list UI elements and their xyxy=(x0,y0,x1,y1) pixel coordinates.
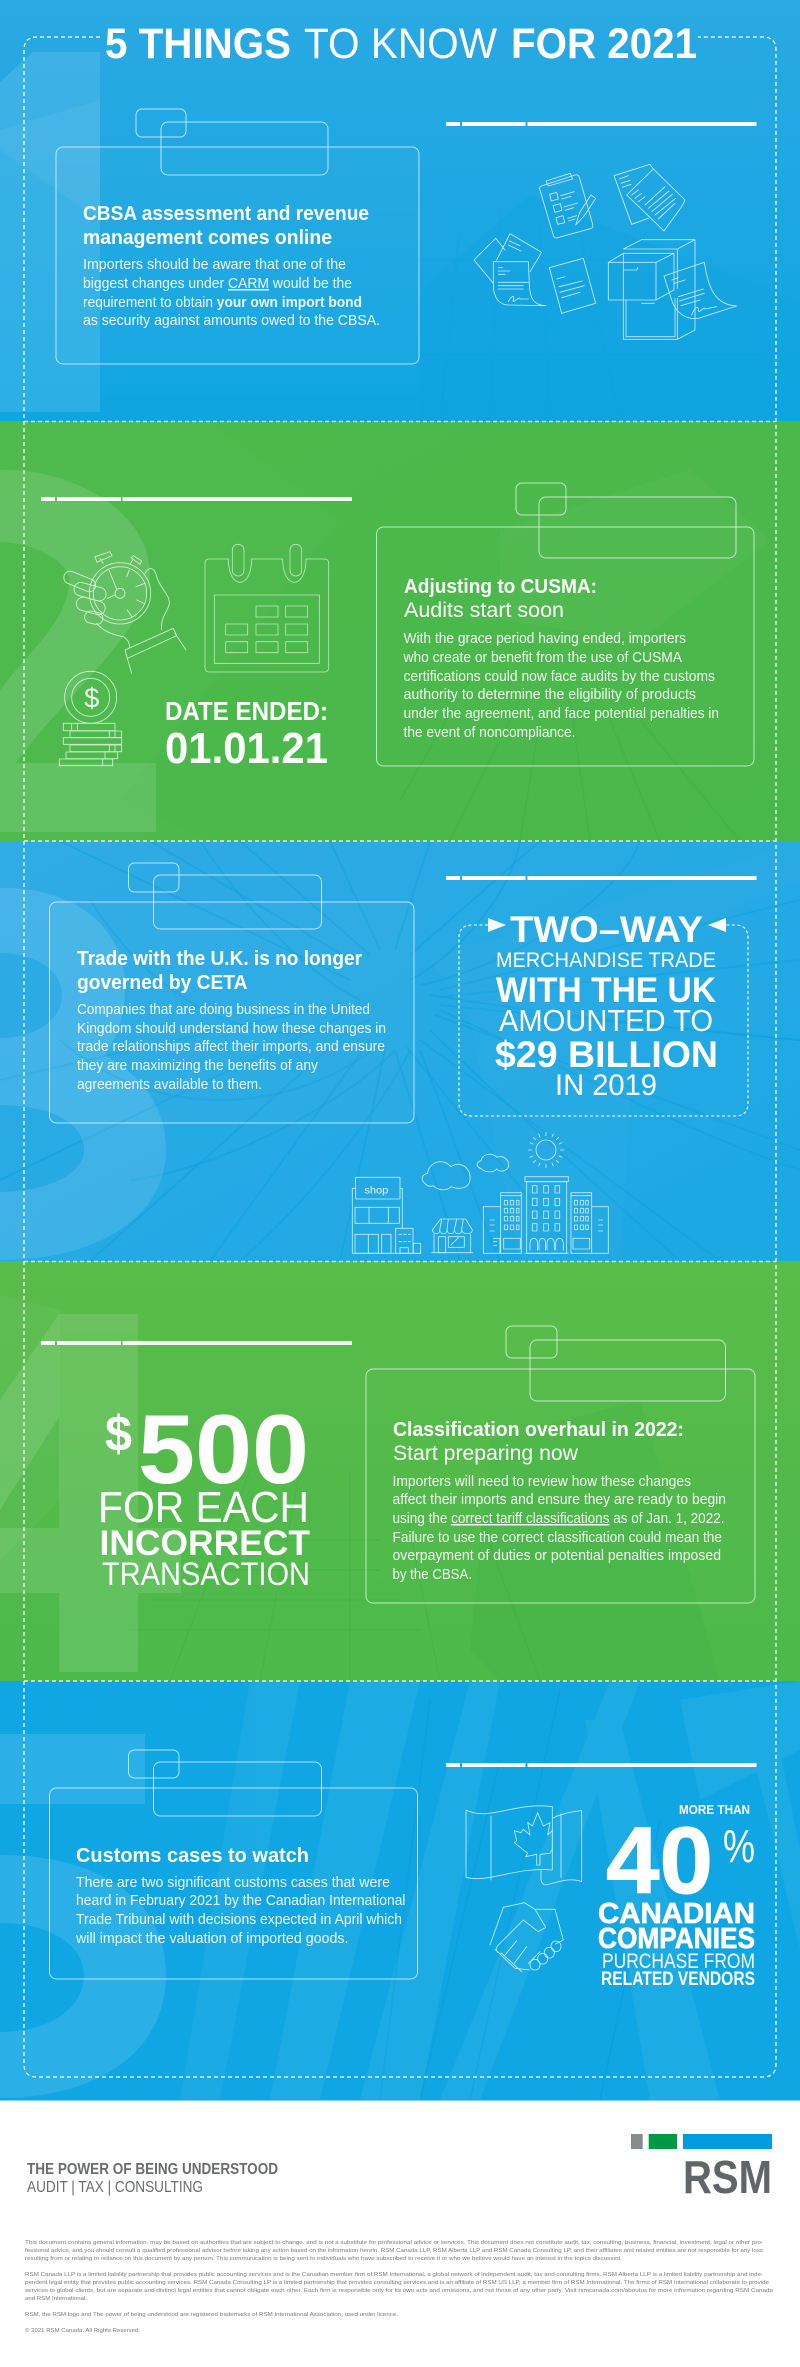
callout: 40% of Canadian companies xyxy=(598,1802,755,1990)
panel: customs cases card xyxy=(50,1750,418,1979)
icon: city with shops, clouds and sun xyxy=(352,1132,608,1253)
legal disclaimer: fessional advice, and you should consult a qualified professional advisor before taking any action based on the information herein. RSM Canada LLP, RSM Alberta LLP and RSM Canada Consulting LP, and their affiliates and related entities are not responsible for any loss xyxy=(25,2248,763,2254)
body text: certifications could now face audits by the customs xyxy=(404,668,715,685)
card frames xyxy=(366,1326,755,1603)
body text: Trade Tribunal with decisions expected in April which xyxy=(76,1911,402,1928)
callout: $500 penalty: TRANSACTION xyxy=(102,1556,310,1592)
body text: the event of noncompliance. xyxy=(404,724,576,741)
background numeral 5 xyxy=(0,1734,166,2098)
body text: Companies that are doing business in the United xyxy=(77,1001,370,1018)
panel: classification card xyxy=(366,1326,755,1603)
title: FOR 2021 xyxy=(511,20,697,68)
callout: date ended xyxy=(165,696,328,773)
background numeral 3 xyxy=(0,888,166,1260)
callout: $500 penalty: 500 xyxy=(138,1394,309,1504)
body text: under the agreement, and face potential penalties in xyxy=(404,705,719,722)
footer tagline: THE POWER OF BEING UNDERSTOOD xyxy=(27,2161,278,2178)
body text xyxy=(77,1001,386,1093)
callout: 40% of Canadian companies: 40 xyxy=(606,1808,713,1914)
callout text: AMOUNTED TO xyxy=(499,1003,713,1038)
callout: 40% of Canadian companies: CANADIAN xyxy=(598,1898,755,1930)
accent bar xyxy=(446,1763,756,1767)
accent bar xyxy=(446,876,756,880)
body text xyxy=(403,630,719,741)
heading: Customs cases to watch xyxy=(76,1844,309,1867)
title: 5 THINGS xyxy=(105,20,291,68)
callout text: $29 BILLION xyxy=(495,1034,718,1075)
dashed callout frame xyxy=(459,925,748,1116)
icon: handshake xyxy=(490,1903,563,1972)
callout: 40% of Canadian companies: % xyxy=(723,1820,755,1872)
footer tagline xyxy=(27,2161,278,2196)
heading: Start preparing now xyxy=(393,1442,579,1465)
body text: Importers will need to review how these changes xyxy=(392,1473,691,1490)
icon: calendar xyxy=(205,544,329,672)
callout: 40% of Canadian companies: MORE THAN xyxy=(679,1802,750,1817)
body text xyxy=(83,256,380,329)
heading: Classification overhaul in 2022: xyxy=(393,1418,684,1441)
body text: Failure to use the correct classification could mean the xyxy=(392,1529,722,1546)
icon: documents and filing cabinet xyxy=(474,164,737,339)
body text: With the grace period having ended, importers xyxy=(404,630,686,647)
callout: two-way trade xyxy=(459,909,748,1116)
callout: date ended: DATE ENDED: xyxy=(165,696,328,726)
legal disclaimer xyxy=(25,2240,774,2334)
body text: overpayment of duties or potential penalties imposed xyxy=(392,1547,721,1564)
title xyxy=(105,20,697,68)
callout text: MERCHANDISE TRADE xyxy=(496,949,716,972)
body text: who create or benefit from the use of CUSMA xyxy=(403,649,682,666)
body text: trade relationships affect their imports, and ensure xyxy=(77,1038,385,1055)
accent bar xyxy=(41,497,352,501)
icon: Canadian flag xyxy=(466,1806,582,1885)
legal disclaimer: services to global clients, but are separate and distinct legal entities that cannot obligate each other. Each firm is responsible only for its own acts and omissions, and not those of any other party. Visit rsmcanada.com/aboutus for more information regarding RSM Canada xyxy=(25,2288,774,2294)
callout: 40% of Canadian companies: PURCHASE FROM xyxy=(602,1950,755,1973)
heading xyxy=(77,947,362,994)
panel: section 4 background xyxy=(0,1261,800,1681)
heading: Audits start soon xyxy=(404,599,564,622)
heading xyxy=(83,202,369,249)
body text: requirement to obtain your own import bond xyxy=(83,294,362,311)
callout: $500 penalty: FOR EACH xyxy=(98,1483,309,1532)
body text: heard in February 2021 by the Canadian International xyxy=(76,1892,406,1909)
heading: governed by CETA xyxy=(77,971,248,994)
arrows xyxy=(488,918,726,932)
legal disclaimer: © 2021 RSM Canada. All Rights Reserved. xyxy=(25,2327,140,2334)
card frames xyxy=(50,863,414,1123)
panel: CUSMA card xyxy=(376,483,754,766)
body text: affect their imports and ensure they are ready to begin xyxy=(392,1491,726,1508)
legal disclaimer: RSM, the RSM logo and The power of being understood are registered trademarks of RSM International Association, used under licence. xyxy=(25,2312,398,2318)
callout text: WITH THE UK xyxy=(496,971,716,1010)
legal disclaimer: resulting from or relating to reliance on this document by any person. This communication is being sent to individuals who have subscribed to receive it or who we believe would have an interest in the topics discussed. xyxy=(25,2256,622,2262)
footer tagline: AUDIT | TAX | CONSULTING xyxy=(27,2179,203,2196)
callout: $500 penalty xyxy=(98,1394,310,1592)
card frames xyxy=(56,109,419,364)
body text: There are two significant customs cases that were xyxy=(76,1874,390,1891)
body text: as security against amounts owed to the CBSA. xyxy=(83,312,380,329)
body text xyxy=(75,1874,406,1947)
panel: UK trade card xyxy=(50,863,414,1123)
panel: section 3 background xyxy=(0,841,800,1261)
accent bar xyxy=(41,1341,352,1345)
background numeral 4 xyxy=(0,1314,181,1672)
callout text xyxy=(495,909,718,1102)
card frames xyxy=(376,483,754,766)
heading: management comes online xyxy=(83,226,332,249)
callout: 40% of Canadian companies: RELATED VENDORS xyxy=(601,1969,755,1990)
body text: authority to determine the eligibility of products xyxy=(404,686,696,703)
body text: they are maximizing the benefits of any xyxy=(77,1057,318,1074)
section divider lines xyxy=(24,422,776,1681)
callout: $500 penalty: $ xyxy=(105,1406,132,1462)
body text xyxy=(392,1473,726,1583)
body text: Kingdom should understand how these changes in xyxy=(77,1020,386,1037)
shop sign label: shop xyxy=(364,1185,389,1196)
title: TO KNOW xyxy=(304,20,497,68)
heading xyxy=(393,1418,684,1465)
RSM logo xyxy=(631,2134,772,2203)
callout text: IN 2019 xyxy=(555,1069,657,1102)
background numeral 2 xyxy=(0,470,156,832)
callout: date ended: 01.01.21 xyxy=(165,724,328,773)
body text: biggest changes under CARM would be the xyxy=(83,275,352,292)
callout: 40% of Canadian companies: COMPANIES xyxy=(598,1923,755,1955)
callout: $500 penalty: INCORRECT xyxy=(100,1524,310,1563)
icon: dollar coin on stack xyxy=(59,671,122,766)
body text: Importers should be aware that one of the xyxy=(83,256,346,273)
body text: agreements available to them. xyxy=(77,1076,262,1093)
heading: Trade with the U.K. is no longer xyxy=(77,947,362,970)
background numeral 1 xyxy=(0,52,100,412)
panel: section 2 background xyxy=(0,421,800,841)
accent bar xyxy=(446,122,756,126)
icon: dollar coin on stack: $ xyxy=(84,682,99,713)
panel: section 5 background xyxy=(0,1681,800,2100)
panel: CBSA card xyxy=(56,109,419,364)
body text: by the CBSA. xyxy=(392,1566,472,1583)
RSM logo: RSM xyxy=(683,2151,772,2203)
legal disclaimer: RSM Canada LLP is a limited liability partnership that provides public accounting services and is the Canadian member firm of RSM International, a global network of independent audit, tax and consulting firms. RSM Alberta LLP is a limited liability partnership and inde- xyxy=(25,2272,763,2278)
card frames xyxy=(50,1750,418,1979)
heading: Adjusting to CUSMA: xyxy=(404,575,597,598)
body text: will impact the valuation of imported goods. xyxy=(75,1930,348,1947)
panel: section 1 background xyxy=(0,0,800,421)
body text: using the correct tariff classifications as of Jan. 1, 2022. xyxy=(392,1510,724,1527)
legal disclaimer: This document contains general information, may be based on authorities that are subject to change, and is not a substitute for professional advice or services. This document does not constitute audit, tax, consulting, business, financial, investment, legal or other pro- xyxy=(25,2240,763,2246)
heading: CBSA assessment and revenue xyxy=(83,202,369,225)
callout text: TWO–WAY xyxy=(510,909,703,950)
legal disclaimer: and RSM International. xyxy=(25,2296,87,2302)
icon: hand holding stopwatch xyxy=(62,552,186,673)
legal disclaimer: pendent legal entity that provides public accounting services. RSM Canada Consulting LP is a limited partnership that provides consulting services and is an affiliate of RSM US LLP, a member firm of RSM International. The firms of RSM International collaborate to provide xyxy=(25,2280,770,2286)
heading xyxy=(404,575,597,622)
